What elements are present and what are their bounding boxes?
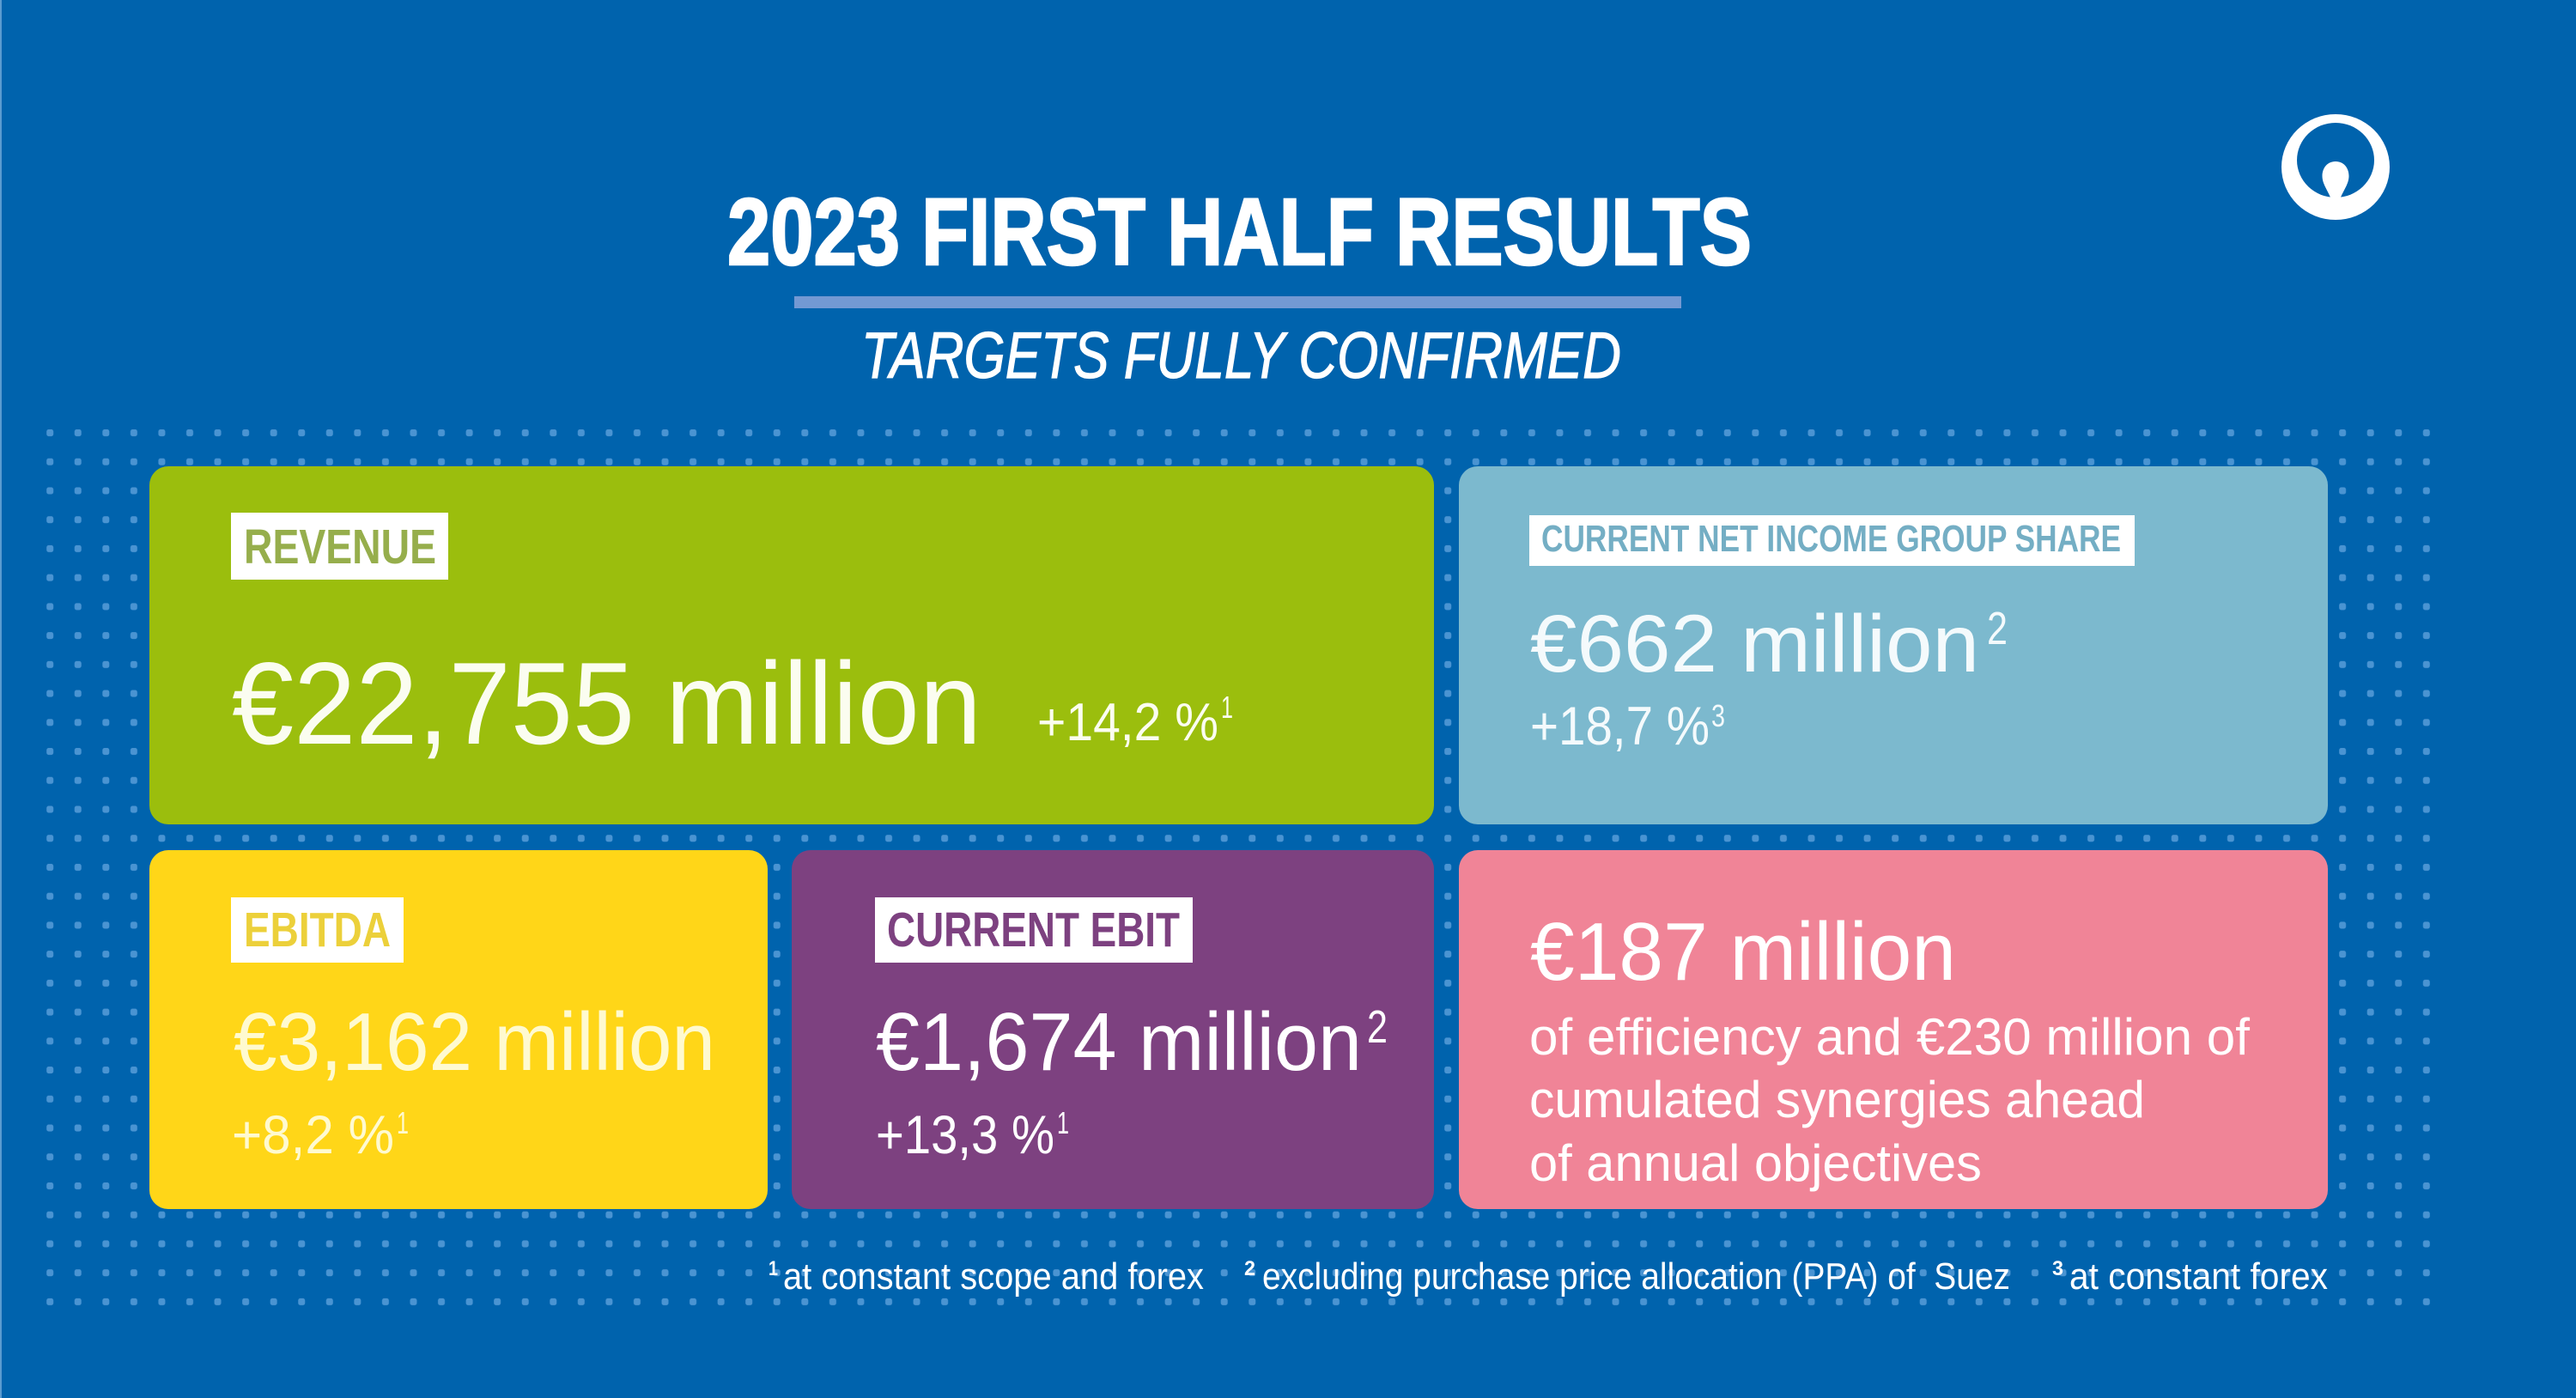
panel: current EBIT — [792, 850, 1434, 1209]
revenue change: 1 — [1221, 690, 1233, 725]
revenue label — [231, 513, 448, 580]
net income label — [1529, 515, 2135, 566]
net income change: +18,7 % — [1530, 696, 1710, 757]
efficiency description: of efficiency and €230 million of — [1529, 1008, 2250, 1066]
footnotes — [769, 1255, 2328, 1298]
footnotes: 2 — [1244, 1257, 1255, 1280]
icon: company logo — [2281, 114, 2390, 220]
net income value: €662 million — [1530, 599, 1979, 690]
net income value: 2 — [1987, 603, 2008, 654]
title: 2023 FIRST HALF RESULTS — [727, 179, 1752, 285]
footnotes: 1 — [769, 1257, 778, 1280]
revenue label: REVENUE — [244, 520, 436, 574]
EBIT change: 1 — [1057, 1105, 1069, 1140]
net income label: CURRENT NET INCOME GROUP SHARE — [1541, 518, 2121, 560]
EBITDA change: 1 — [397, 1105, 409, 1140]
panel: current net income — [1459, 466, 2328, 824]
footnotes: excluding purchase price allocation (PPA) of Suez — [1262, 1255, 2010, 1298]
EBIT value: €1,674 million — [876, 996, 1362, 1088]
revenue value: €22,755 million — [232, 638, 981, 769]
EBIT label: CURRENT EBIT — [887, 903, 1180, 957]
EBIT change: +13,3 % — [876, 1105, 1054, 1165]
EBITDA change: +8,2 % — [232, 1105, 394, 1165]
EBITDA value: €3,162 million — [234, 996, 715, 1088]
panel: revenue — [149, 466, 1434, 824]
efficiency description — [1529, 1008, 2250, 1192]
efficiency description: of annual objectives — [1529, 1134, 1982, 1192]
net income change: 3 — [1711, 698, 1725, 733]
footnotes: 3 — [2052, 1257, 2063, 1280]
subtitle: TARGETS FULLY CONFIRMED — [861, 319, 1621, 392]
panel: EBITDA — [149, 850, 768, 1209]
footnotes: at constant forex — [2069, 1255, 2328, 1298]
efficiency value: €187 million — [1530, 906, 1956, 998]
panel: efficiency and synergies — [1459, 850, 2328, 1209]
footnotes: at constant scope and forex — [783, 1255, 1204, 1298]
title underline — [794, 296, 1681, 308]
EBIT value: 2 — [1367, 1001, 1388, 1053]
EBITDA label: EBITDA — [244, 903, 391, 957]
revenue change: +14,2 % — [1037, 693, 1218, 752]
efficiency description: cumulated synergies ahead — [1529, 1071, 2145, 1128]
